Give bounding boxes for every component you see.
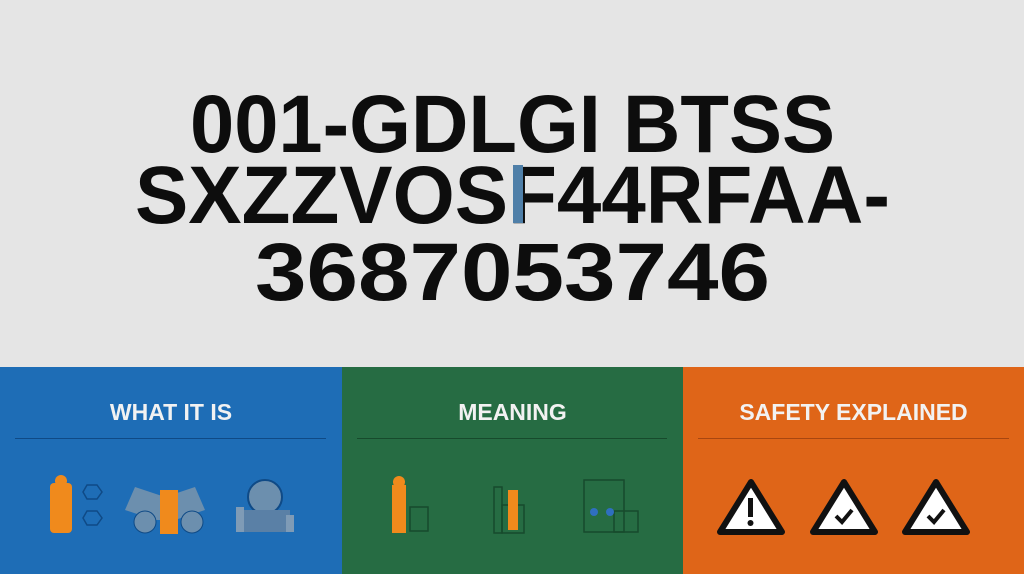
heading: safety explained: SAFETY EXPLAINED — [739, 399, 968, 425]
icons: what it is — [50, 475, 294, 534]
icons: warning triangles — [717, 479, 970, 535]
title code — [135, 79, 890, 318]
panel: safety explained — [683, 367, 1024, 574]
panel: meaning — [342, 367, 683, 574]
title code: SXZZVOSF44RFAA- — [135, 150, 890, 241]
title code: 3687053746 — [255, 227, 770, 318]
title code: 001-GDLGI BTSS — [190, 79, 835, 170]
heading: what it is: WHAT IT IS — [110, 399, 232, 425]
heading: meaning: MEANING — [458, 399, 567, 425]
icons: meaning — [392, 476, 639, 534]
panel: what it is — [0, 367, 342, 574]
